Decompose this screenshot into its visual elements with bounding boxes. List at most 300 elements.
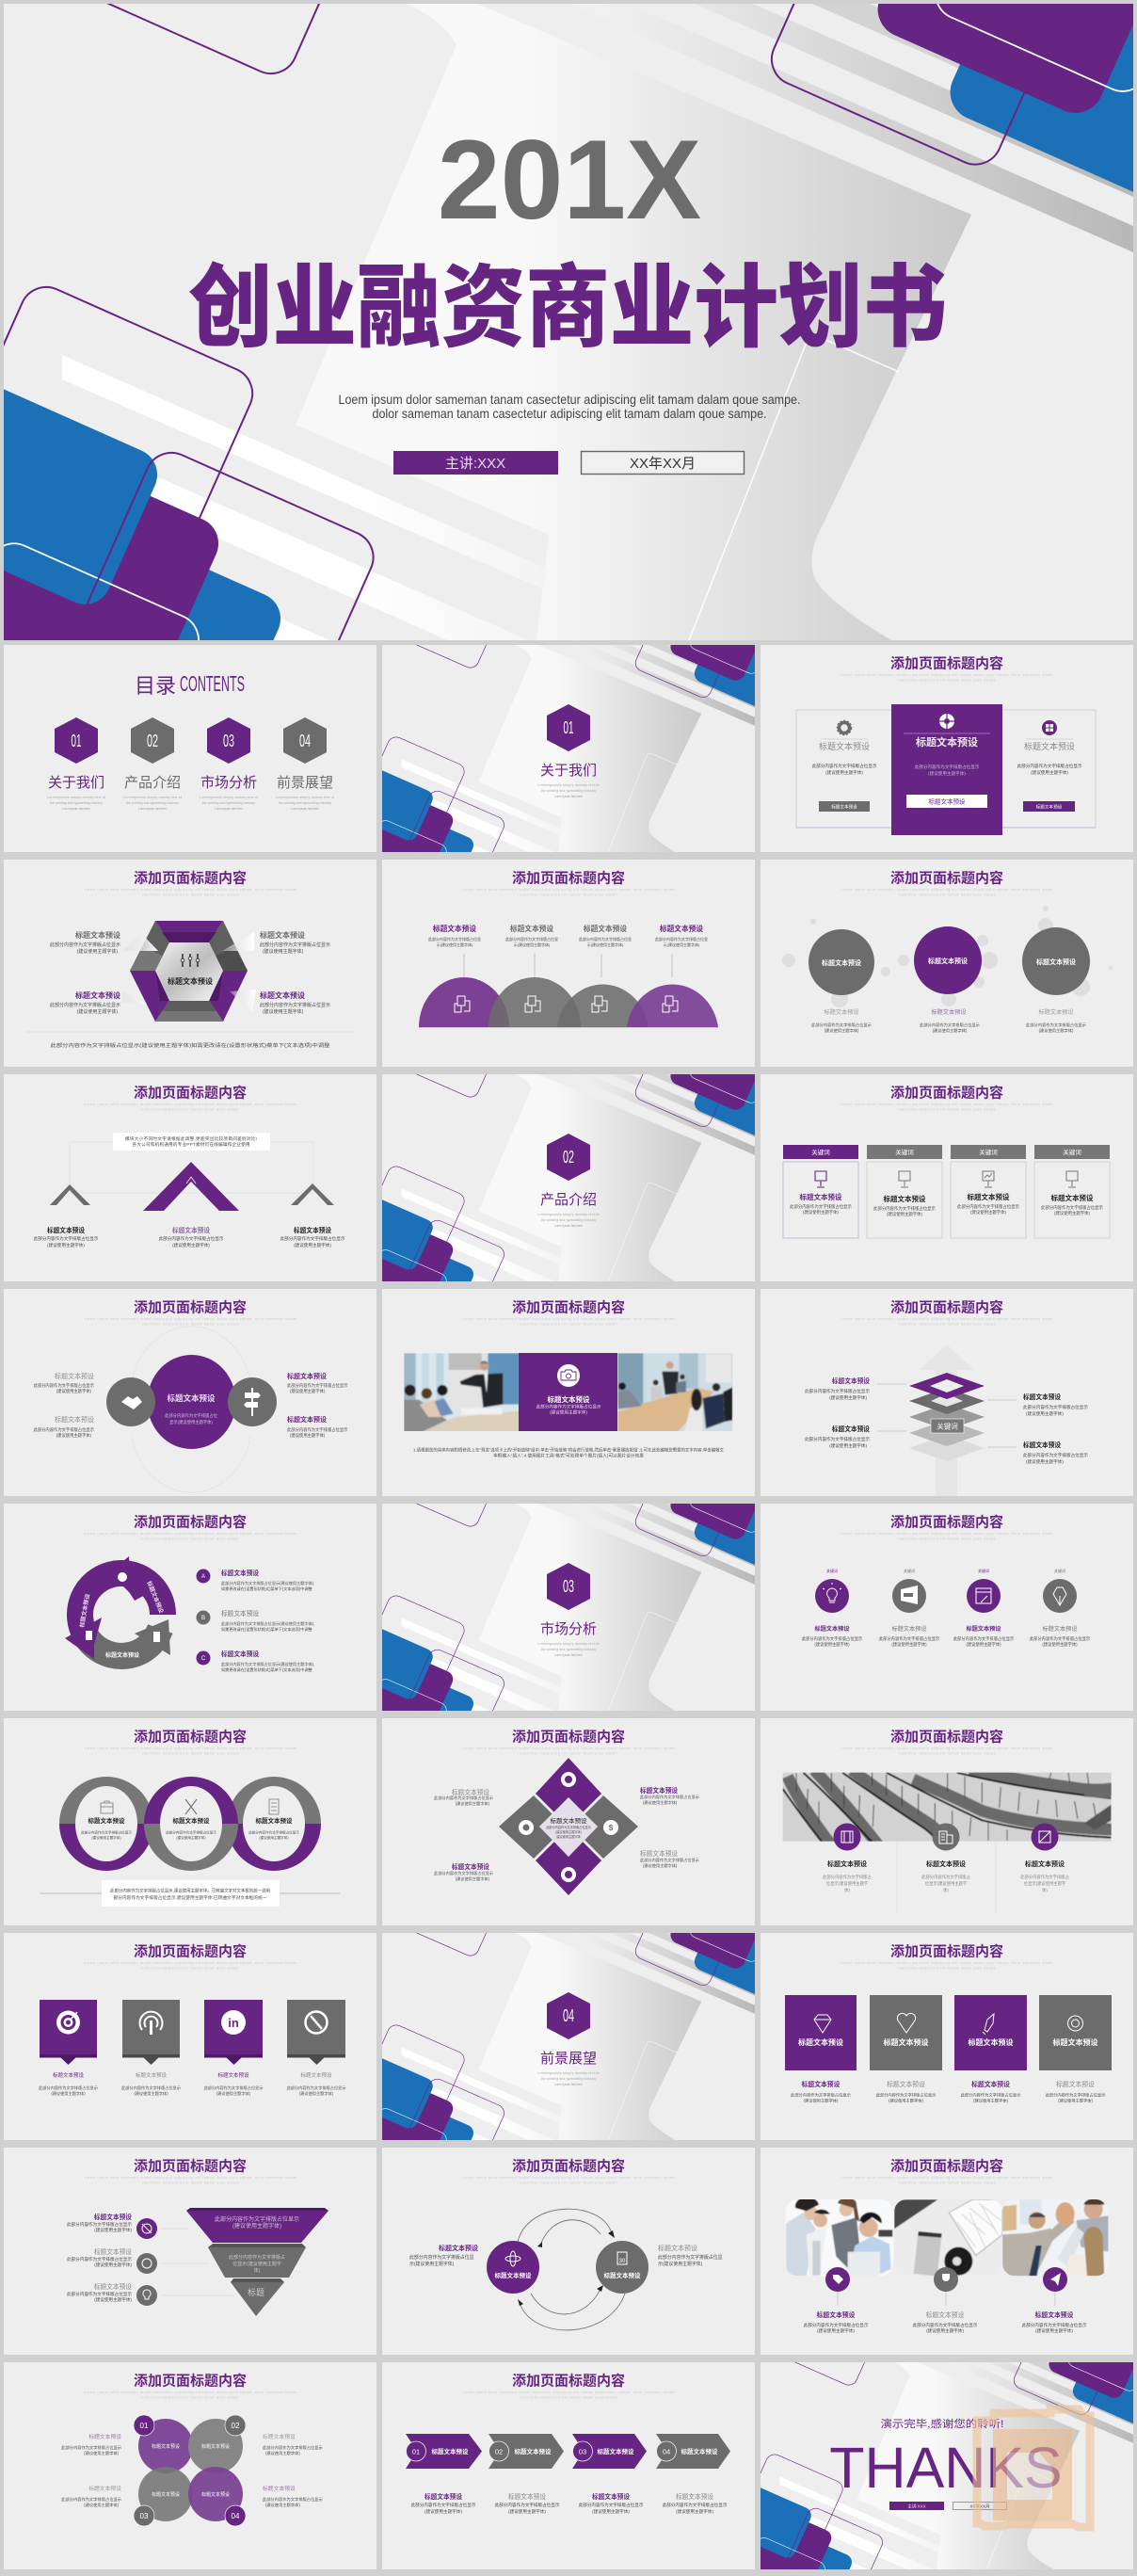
header: Lorem ipsum dolor sameman tanam casectetur adipiscing elit tamam dalam qoue sampe, dolor sameman tanam [841,1961,1053,1965]
card 1: 此部分内容作为文字排版占位显示 [790,1203,853,1210]
header: Lorem ipsum dolor sameman tanam casectetur adipiscing elit tamam dalam qoue sampe, dolor sameman tanam [841,2176,1053,2180]
callout bottom left: (建议使用主题字体) [456,1876,490,1882]
cycle diagram: 标题文本预设 [78,1593,91,1628]
callout top right: (建议使用主题字体) [265,2450,300,2456]
section note [538,1213,600,1228]
header: 添加页面标题内容 [512,1729,625,1746]
column text 4: 示(建议使用主题字体) [664,942,700,947]
callout 3: 此部分内容作为文字排版占位显示 [287,1382,348,1389]
connector lines [877,1384,1017,1447]
caption 2: (建议使用主题字体) [926,2327,964,2334]
item 03 [200,717,258,811]
ring 2 content: 标题文本预设 [173,1816,210,1825]
circle 1 [809,929,874,995]
callout 3: (建议使用主题字体) [290,1388,326,1394]
tile 3: 标题文本预设 [971,2080,1010,2088]
ring 3 content: 标题文本预设 [256,1816,293,1825]
callout 4 [1023,1441,1088,1465]
list item B: 标题文本预设 [221,1609,259,1618]
list item C: C [201,1656,206,1662]
header: casectetur adipiscing elit tamam dalam qoue sampe [141,2395,239,2399]
item 03: 03 [223,732,234,750]
funnel layer 1: (建议使用主题字体) [232,2222,281,2230]
ring 3 content [248,1799,299,1840]
left panel: 标题文本预设 [831,804,857,810]
callout 2: (建议使用主题字体) [94,2262,132,2268]
caption 1: (建议使用主题字体) [424,2508,462,2515]
slide: four icon circles [761,1504,1133,1711]
card 1: 标题文本预设 [800,1192,842,1201]
item 4: 标题文本预设 [1042,1625,1078,1633]
caption 2 [495,2492,560,2515]
step 1: 01 [412,2448,420,2455]
left text: 标题文本预设 [439,2244,478,2252]
callout 1: 标题文本预设 [55,1372,94,1380]
callout top left: 标题文本预设 [452,1788,489,1796]
column text 2: 示(建议使用主题字体) [514,942,551,947]
section badge: 01 [563,718,574,737]
caption 1: (建议使用主题字体) [817,2327,855,2334]
header: 添加页面标题内容 [134,1943,247,1960]
main circle [147,1355,235,1449]
callout bottom right [263,2485,323,2508]
column text 1: 标题文本预设 [433,924,476,933]
callout top left: 标题文本预设 [88,2433,121,2440]
step 2 [488,2434,564,2469]
photo left: meeting [402,1351,520,1433]
item 02: Lorem ipsum has been [138,807,167,811]
note box: 此部分内容作为文字排版占位显示,建议使用主题字体。已转曲文字对文本框的统一说明 [110,1887,270,1894]
header [463,1299,675,1326]
list item A: A [201,1574,205,1580]
slide: three pricing panels [761,645,1133,852]
caption 3: (建议使用主题字体) [592,2508,630,2515]
column text 2: 标题文本预设 [510,924,553,933]
callout 3: (建议使用主题字体) [1026,1410,1064,1417]
callout bottom right: 标题文本预设 [263,2485,296,2492]
callout 1 [34,1372,95,1394]
column text 3: 位显示(建议使用主题字 [1024,1880,1065,1887]
badge 2 [932,1823,960,1851]
header: casectetur adipiscing elit tamam dalam qoue sampe [141,1537,239,1540]
column text 3 [1020,1860,1069,1893]
slide: cover [0,0,1137,863]
pin card 2: 此部分内容作为文字排版占位显示 [121,2085,181,2091]
callout bottom left [61,2485,121,2508]
section note [538,783,600,798]
callout 3: (建议使用主题字体) [94,2296,132,2303]
callout bottom left [434,1862,493,1882]
slide: section 02 [318,997,830,1354]
callout top left: 此部分内容作为文字排版占位显示 [50,942,120,948]
tile 2: 标题文本预设 [887,2080,925,2088]
pin card 4 [287,2000,345,2097]
callout 3: 标题文本预设 [1023,1393,1061,1401]
slide: three rings [4,1718,376,1925]
header: Lorem ipsum dolor sameman tanam casectetur adipiscing elit tamam dalam qoue sampe, dolor sameman tanam [85,2176,296,2180]
center text: (建议使用主题字体) [555,1829,582,1834]
pin 2 [934,2267,958,2306]
caption 2: 此部分内容作为文字排版占位显示 [920,1022,980,1028]
item 3: 关键词 [978,1568,989,1573]
section note: the printing and typesetting industry [541,2077,596,2081]
slide: section 01 [318,568,830,925]
callout 1: 此部分内容作为文字排版占位显示 [34,1382,95,1389]
contents heading: 目录 [135,674,176,698]
section note [538,1642,600,1657]
header: casectetur adipiscing elit tamam dalam qoue sampe [141,1107,239,1111]
text right: (建议使用主题字体) [294,1242,331,1248]
pin card 3: 标题文本预设 [217,2071,249,2079]
right text: 此部分内容作为文字排版占位显 [658,2254,723,2261]
column text 2: 此部分内容作为文字排版占 [921,1874,970,1880]
caption 3: (建议使用主题字体) [1039,1027,1074,1034]
item 02: 产品介绍 [124,775,181,791]
item 03: Loremipsumis simply dummy text of [200,796,258,799]
slide: domes [382,860,755,1067]
left node: 标题文本预设 [495,2271,532,2279]
item 3: 标题文本预设 [966,1625,1001,1633]
card 3: 此部分内容作为文字排版占位显示 [957,1203,1020,1210]
header [85,2373,296,2399]
background arrow [920,1344,974,1496]
card 1: 关键词 [811,1148,830,1156]
header: Lorem ipsum dolor sameman tanam casectetur adipiscing elit tamam dalam qoue sampe, dolor sameman tanam [85,888,296,892]
section badge [547,704,590,751]
column text 4 [655,924,708,947]
item 03: Lorem ipsum has been [215,807,243,811]
callout 2 [805,1425,870,1449]
ring 3 [227,1777,321,1871]
card 4: 此部分内容作为文字排版占位显示 [1041,1204,1104,1211]
item 1 [802,1568,863,1648]
column text 3: 标题文本预设 [1025,1860,1065,1868]
list item A: 此部分内容作为文字排版占位显示(建议使用主题字体), [221,1580,314,1586]
callout top left: (建议使用主题字体) [84,2450,120,2456]
header: 添加页面标题内容 [890,1729,1003,1746]
caption 1: 此部分内容作为文字排版占位显示 [804,2322,869,2328]
callout 4 [287,1415,348,1439]
caption 2: 标题文本预设 [926,2310,965,2319]
keyword tag [931,1419,964,1433]
header [85,1729,296,1755]
column text 1: 此部分内容作为文字排版占 [823,1874,872,1880]
caption 3: 此部分内容作为文字排版占位显示 [1022,2322,1087,2328]
column text 1: 示(建议使用主题字体) [437,942,473,947]
header [85,2158,296,2184]
header: casectetur adipiscing elit tamam dalam qoue sampe [520,2181,617,2184]
callout top left [61,2433,121,2456]
list item C: 此部分内容作为文字排版占位显示(建议使用主题字体), [221,1661,314,1666]
tile 1: 此部分内容作为文字排版占位显示 [791,2092,851,2098]
cycle diagram: 标题文本预设 [145,1580,165,1614]
step 3: 03 [579,2448,586,2455]
header: Lorem ipsum dolor sameman tanam casectetur adipiscing elit tamam dalam qoue sampe, dolor sameman tanam [85,1532,296,1536]
callout 2: (建议使用主题字体) [829,1442,867,1449]
dome icons [455,996,678,1012]
section name: 市场分析 [540,1621,597,1637]
header: 添加页面标题内容 [134,1729,247,1746]
callout bottom right: (建议使用主题字体) [263,1008,304,1015]
caption 1: 此部分内容作为文字排版占位显示 [811,1022,872,1028]
circle 2 [914,926,982,994]
note box: 部分内容作为文字排版占位显示,建议使用主题字体,已转曲文字对文本框的统一 [113,1894,267,1901]
tile 4: 标题文本预设 [1052,2037,1097,2047]
callout 1: 此部分内容作为文字排版占位显示 [805,1388,870,1394]
presenter badge: 主讲:XXX [907,2503,926,2510]
section badge: 02 [563,1148,574,1167]
tile 4: (建议使用主题字体) [1058,2098,1093,2103]
number 01 [134,2415,154,2436]
card 4 [1034,1145,1110,1238]
circle 1: 标题文本预设 [822,958,861,967]
column text 2 [505,924,558,947]
header: casectetur adipiscing elit tamam dalam qoue sampe [898,678,996,682]
header: Lorem ipsum dolor sameman tanam casectetur adipiscing elit tamam dalam qoue sampe, dolor sameman tanam [841,1747,1053,1750]
note box [102,1880,280,1907]
text center: 标题文本预设 [172,1226,210,1234]
callout top left [50,930,120,955]
tile 1: 标题文本预设 [802,2080,841,2088]
callout top right: 此部分内容作为文字排版占位显示 [260,942,330,948]
keyword tag: 关键词 [937,1422,958,1431]
tile 2 [870,1995,942,2103]
header: casectetur adipiscing elit tamam dalam qoue sampe [141,893,239,896]
header: casectetur adipiscing elit tamam dalam qoue sampe [898,1751,996,1755]
list item B: B [201,1616,205,1621]
section note: Lorem ipsum has been [554,1224,583,1228]
presenter badge [393,451,558,475]
callout top right: 标题文本预设 [260,930,305,940]
circle cluster: 标题文本预设 [152,2491,180,2498]
left text: 此部分内容作为文字排版占位显 [409,2254,474,2261]
callout 1: (建议使用主题字体) [829,1394,867,1401]
funnel layer 3: 标题 [248,2287,264,2297]
circle 3: 标题文本预设 [1036,958,1076,966]
header [841,1514,1053,1540]
step 2: 标题文本预设 [514,2447,552,2455]
callout 3: 标题文本预设 [287,1372,327,1380]
header: 添加页面标题内容 [134,1299,247,1316]
cycle diagram: 标题文本预设 [105,1651,139,1659]
header: casectetur adipiscing elit tamam dalam qoue sampe [141,2181,239,2184]
header: Lorem ipsum dolor sameman tanam casectetur adipiscing elit tamam dalam qoue sampe, dolor sameman tanam [85,1103,296,1106]
card 2 [867,1145,942,1238]
pin card 1: 标题文本预设 [53,2071,84,2079]
funnel layer 1: 此部分内容作为文字排版占位显示 [215,2215,299,2223]
callout bottom left: 标题文本预设 [452,1862,489,1871]
header: Lorem ipsum dolor sameman tanam casectetur adipiscing elit tamam dalam qoue sampe, dolor sameman tanam [463,888,675,892]
item 1: 关键词 [826,1568,838,1573]
decorative bubbles [782,906,1113,1007]
pin card 4: (建议使用主题字体) [299,2090,334,2097]
callout 4: 此部分内容作为文字排版占位显示 [1023,1452,1088,1458]
header: 添加页面标题内容 [512,870,625,887]
header: casectetur adipiscing elit tamam dalam qoue sampe [141,1751,239,1755]
right node: 标题文本预设 [604,2271,641,2279]
diamond shape: $ [609,1824,614,1832]
caption 1: 标题文本预设 [424,2492,462,2501]
callout bottom right: 此部分内容作为文字排版占位显示 [263,2496,323,2503]
item 02: the printing and typesetting industry [126,801,179,805]
list item A: 标题文本预设 [221,1569,259,1577]
photo: curved facade [781,1770,1113,1845]
purple panel: 标题文本预设 [548,1394,590,1404]
caption 1 [804,2310,869,2334]
item 1: 此部分内容作为文字排版占位显示 [802,1635,863,1642]
card 2: 关键词 [895,1148,914,1156]
icon 1 [136,2218,157,2239]
tile 2: 此部分内容作为文字排版占位显示 [876,2092,936,2098]
header: 添加页面标题内容 [890,2158,1003,2175]
callout 3 [67,2282,132,2303]
ring 2 [144,1777,238,1871]
caption 2: 此部分内容作为文字排版占位显示 [913,2322,978,2328]
header: 添加页面标题内容 [134,1514,247,1531]
card 2: 此部分内容作为文字排版占位显示 [873,1205,937,1212]
callout top left: (建议使用主题字体) [77,948,118,955]
right panel [1017,720,1082,812]
step 4: 04 [663,2448,670,2455]
callout top left: 此部分内容作为文字排版占位显示 [61,2444,121,2451]
funnel layer 2: 此部分内容作为文字排版占 [229,2254,285,2261]
number 04 [225,2505,246,2526]
number 03: 03 [140,2512,149,2520]
list item B [196,1609,314,1632]
purple panel: 此部分内容作为文字排版占位显示 [536,1403,601,1410]
left panel: 标题文本预设 [819,741,870,751]
card 3: 标题文本预设 [968,1192,1010,1201]
item 2 [879,1568,940,1648]
funnel layer 2: 体) [254,2267,261,2274]
circle cluster: 标题文本预设 [152,2443,180,2450]
callout 2: 标题文本预设 [55,1415,94,1424]
caption 2: (建议使用主题字体) [508,2508,546,2515]
ring 3 content: (建议使用主题字体) [259,1835,289,1840]
section badge: 03 [563,1577,574,1596]
item 1: 标题文本预设 [814,1625,850,1633]
subtitle text: dolor sameman tanam casectetur adipiscing elit tamam dalam qoue sampe. [373,406,766,421]
slide: keyword cards [761,1074,1133,1281]
watermark stamp [977,2409,1090,2527]
callout top right [260,930,330,955]
slide: section 04 [318,1856,830,2213]
step 4: 标题文本预设 [681,2447,718,2455]
pin card 2: (建议使用主题字体) [134,2090,168,2097]
text right [280,1226,345,1248]
section name: 产品介绍 [540,1192,597,1208]
contents heading: CONTENTS [180,671,245,696]
dashed orbit [132,1327,250,1492]
item 02: Loremipsumis simply dummy text of [123,796,182,799]
callout top right: (建议使用主题字体) [263,948,304,955]
callout 2: 此部分内容作为文字排版占位显示 [67,2256,132,2262]
header: casectetur adipiscing elit tamam dalam qoue sampe [898,2181,996,2184]
header [85,870,296,896]
callout bottom left: (建议使用主题字体) [84,2502,120,2508]
purple panel: (建议使用主题字体) [550,1409,587,1416]
chevron center [143,1162,239,1211]
funnel layer 1 [186,2208,328,2243]
callout 4: 标题文本预设 [287,1415,327,1424]
slide: stacked diamonds [761,1289,1133,1496]
list item C [196,1650,314,1672]
callout top right: 标题文本预设 [640,1786,678,1795]
callout bottom left: 此部分内容作为文字排版占位显示 [434,1870,493,1876]
ring 1 content [81,1801,132,1840]
right satellite [228,1377,277,1426]
header: 添加页面标题内容 [134,2158,247,2175]
header [85,1299,296,1326]
item 03: 市场分析 [200,775,257,791]
tile 3 [954,1995,1027,2103]
callout 1: 此部分内容作为文字排版占位显示 [67,2221,132,2228]
column text 4: 此部分内容作为文字排版占位显 [655,936,708,942]
item 03: the printing and typesetting industry [202,801,255,805]
column text 2 [921,1860,970,1893]
pin 3 [1043,2267,1067,2306]
callout 3 [287,1372,348,1394]
slide: three circles [761,860,1133,1067]
column text 3: 标题文本预设 [584,924,627,933]
slide: cycle arrows [4,1504,376,1711]
card 4: (建议使用主题字体) [1054,1210,1091,1216]
diamond stack [909,1373,985,1461]
date badge [582,452,744,475]
column text 3: 示(建议使用主题字体) [587,942,624,947]
header [463,2158,675,2184]
caption 3: 标题文本预设 [1035,2310,1074,2319]
callout bottom left: (建议使用主题字体) [77,1008,118,1015]
title: 201X: 201X [438,117,701,243]
step 3: 标题文本预设 [597,2447,634,2455]
cycle arcs [518,2209,625,2330]
header: Lorem ipsum dolor sameman tanam casectetur adipiscing elit tamam dalam qoue sampe, dolor sameman tanam [841,1532,1053,1536]
caption 3 [1026,1008,1086,1034]
text left: 此部分内容作为文字排版占位显示 [34,1235,99,1242]
card 1 [783,1145,858,1238]
left node [487,2241,539,2294]
callout bottom left: 此部分内容作为文字排版占位显示 [61,2496,121,2503]
pin card 3 [204,2000,263,2097]
header: casectetur adipiscing elit tamam dalam qoue sampe [898,1537,996,1540]
slide: overlapping circles [4,2362,376,2569]
header [841,870,1053,896]
callout 4: 此部分内容作为文字排版占位显示 [287,1426,348,1433]
callout top right: 标题文本预设 [263,2433,296,2440]
photo right: meeting [617,1351,734,1433]
caption 1: 此部分内容作为文字排版占位显示 [411,2502,476,2508]
ring 3 content: 此部分内容作为文字排版占位显示 [248,1830,299,1834]
header [841,655,1053,682]
caption 4 [663,2492,728,2515]
step 2: 02 [495,2448,503,2455]
section badge [547,1134,590,1181]
header: casectetur adipiscing elit tamam dalam qoue sampe [141,1966,239,1970]
description [413,1446,725,1459]
item 01: Loremipsumis simply dummy text of [47,796,105,799]
circle cluster [138,2419,243,2521]
callout 2 [34,1415,95,1439]
slide: pin cards [4,1933,376,2140]
column text 2: 体) [943,1887,949,1893]
contents heading [135,671,245,698]
column text 1: 此部分内容作为文字排版占位显 [428,936,481,942]
card 2: (建议使用主题字体) [887,1211,923,1217]
column text 1 [823,1860,872,1893]
callout 3: 此部分内容作为文字排版占位显示 [1023,1404,1088,1410]
item 3: (建议使用主题字体) [966,1641,1001,1648]
